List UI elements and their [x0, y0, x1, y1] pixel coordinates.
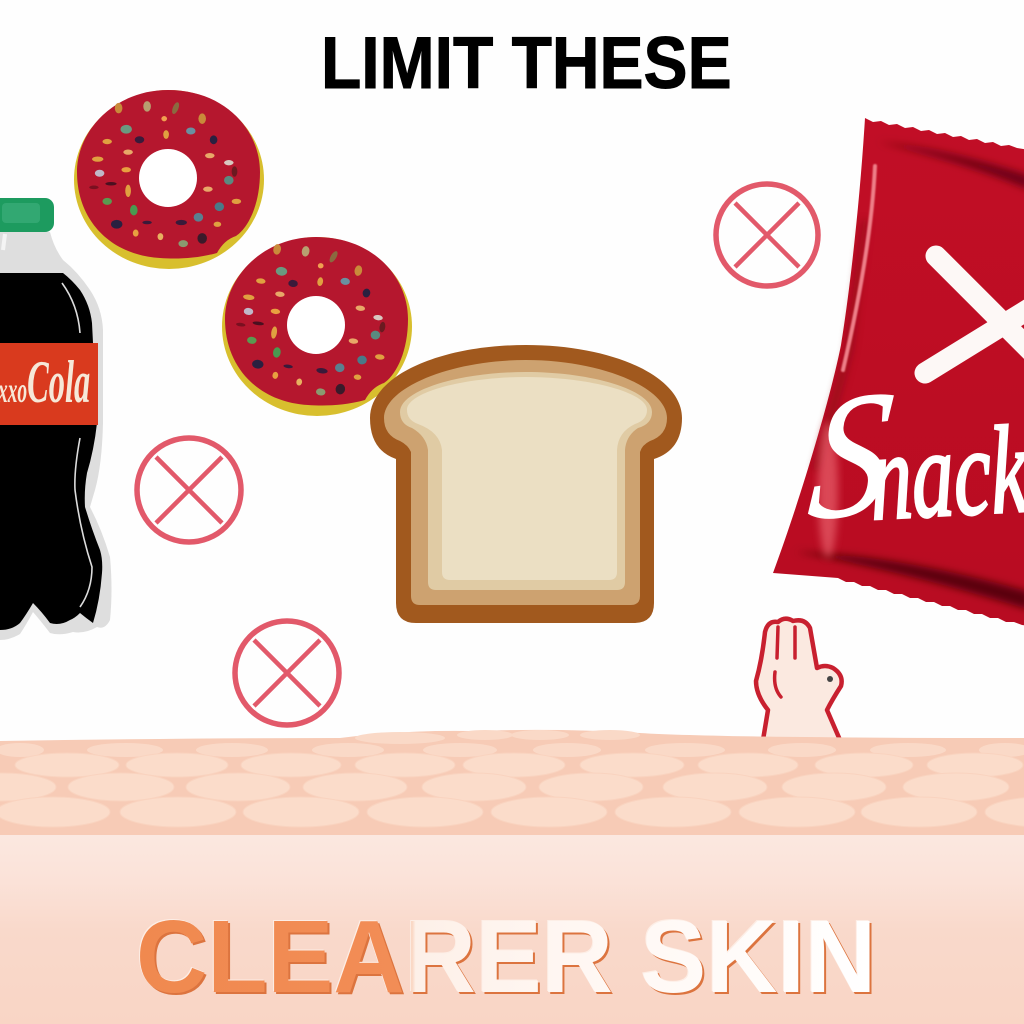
bottle shell — [0, 232, 112, 640]
hand mark — [827, 676, 833, 682]
heading shadow: CLEARER SKIN — [138, 902, 878, 1016]
bag highlight — [843, 166, 875, 370]
skin cells row 4 — [0, 797, 1024, 827]
heading: clearer skin — [135, 899, 878, 1016]
icon: cross circle right — [716, 184, 818, 286]
bread crumb — [407, 377, 647, 580]
bag cross — [925, 256, 1024, 373]
cap glint — [2, 203, 40, 223]
icon: donut top — [74, 90, 264, 269]
bottle liquid — [0, 273, 102, 630]
skin cells row 2 — [15, 753, 1023, 777]
skin lower panel — [0, 835, 1024, 1024]
skin surface band — [0, 730, 1024, 836]
skin cells row 1 — [0, 730, 1024, 757]
icon: cola bottle — [0, 198, 112, 640]
icon: cross circle lower — [235, 621, 339, 725]
bag bottom seam shadow — [795, 552, 1024, 610]
skin cells row 3 — [0, 773, 1009, 801]
bag brand text: S — [803, 351, 900, 559]
bag left shadow — [812, 220, 868, 470]
icon: snack bag — [773, 118, 1024, 626]
bread mid layer — [400, 372, 652, 590]
icon: hand — [756, 619, 842, 740]
heading glow: CLEARER SKIN — [135, 899, 875, 1013]
bread rim — [384, 360, 667, 605]
bag glare — [818, 422, 838, 558]
bag top seam shadow — [878, 142, 1024, 190]
bottle cap — [0, 198, 54, 232]
heading face: CLEARER SKIN — [136, 900, 876, 1014]
icon: bread slice — [370, 345, 682, 623]
bread crust — [370, 345, 682, 623]
bag body — [773, 118, 1024, 626]
icon: donut bottom — [222, 237, 412, 416]
bag brand text — [803, 351, 1024, 559]
skin layer — [0, 730, 1024, 836]
icon: cross circle left — [137, 438, 241, 542]
bottle label — [0, 343, 98, 425]
finger lines — [775, 627, 795, 697]
title: LIMIT THESE — [321, 22, 732, 104]
bottle brand: xxoCola — [0, 350, 90, 416]
bottle neck glint — [3, 234, 5, 250]
bottle highlights — [62, 283, 92, 607]
